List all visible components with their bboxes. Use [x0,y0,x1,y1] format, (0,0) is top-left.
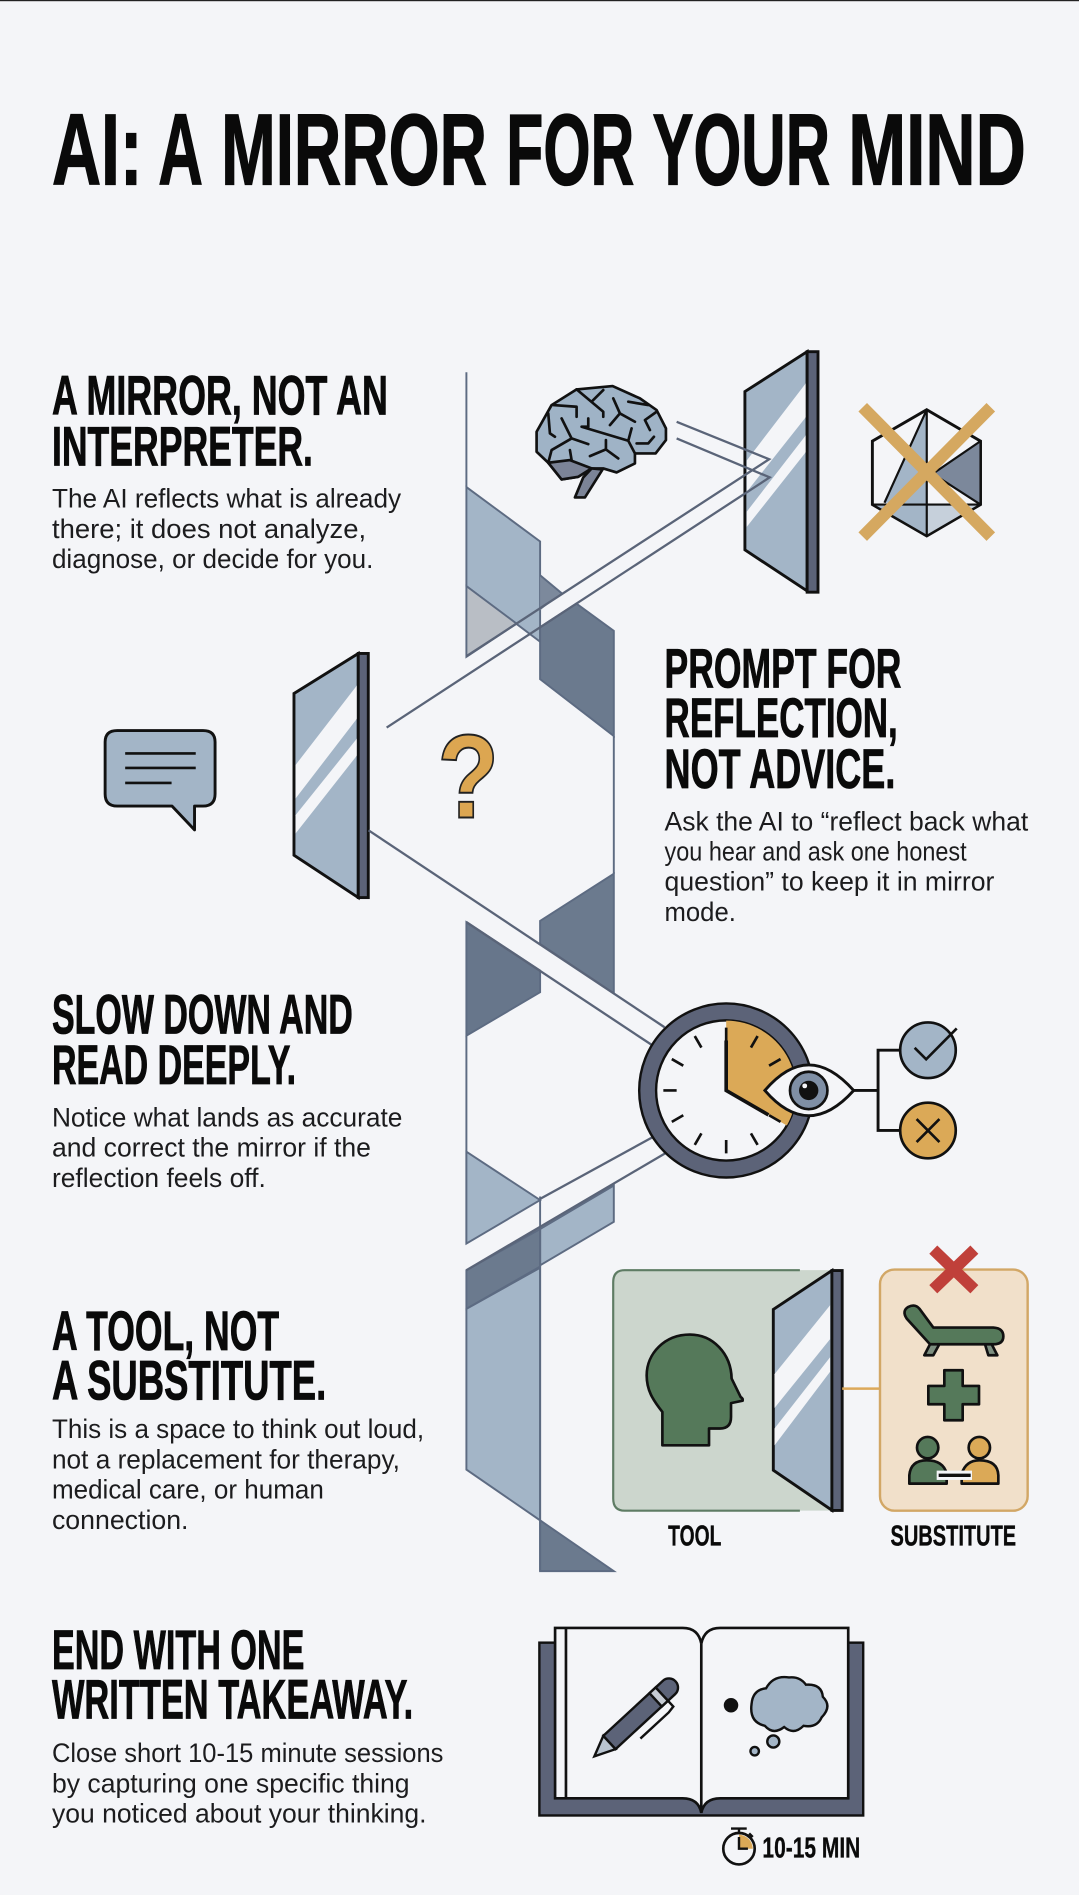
text: slow down body [52,1101,402,1193]
reflected light rays [369,422,770,1270]
title [52,92,1026,206]
text: slow down body: Notice what lands as accurate [52,1101,402,1132]
text: tool body: medical care, or human [52,1474,324,1505]
text: takeaway body: by capturing one specific thing [52,1767,410,1798]
heading: a tool, not a substitute: A SUBSTITUTE. [52,1349,326,1411]
text: slow down body: reflection feels off. [52,1162,266,1193]
text: takeaway body: you noticed about your thinking. [52,1797,427,1828]
text: mirror body [52,483,402,574]
heading: a tool, not a substitute [52,1300,326,1411]
title: AI: [52,92,143,206]
text: takeaway body: Close short 10-15 minute sessions [52,1737,443,1768]
heading: slow down and read deeply: SLOW DOWN AND [52,983,353,1045]
icon: crossed-out crystal [863,407,991,537]
text: prompt body: you hear and ask one honest [665,835,967,866]
text: prompt body: Ask the AI to “reflect back what [665,805,1029,836]
heading: prompt for reflection [665,638,901,800]
heading: a mirror, not an interpreter [52,365,388,477]
text: tool body: connection. [52,1504,188,1535]
heading: slow down and read deeply: READ DEEPLY. [52,1034,296,1096]
connector [842,1388,880,1390]
icon: head silhouette [647,1335,743,1445]
heading: end with one written takeaway: WRITTEN TAKEAWAY. [52,1669,413,1731]
icon: stopwatch [723,1829,755,1864]
icon: thought cloud [750,1677,827,1755]
heading: a tool, not a substitute: A TOOL, NOT [52,1300,279,1362]
icons: couch, medical cross, people [905,1306,1003,1484]
heading: prompt for reflection: NOT ADVICE. [665,738,895,800]
label: substitute: SUBSTITUTE [891,1521,1016,1553]
panel: tool [613,1270,833,1511]
heading: end with one written takeaway: END WITH ONE [52,1619,304,1681]
icon: mirror tool [773,1271,842,1510]
text: mirror body: The AI reflects what is already [52,483,402,514]
panel: substitute [880,1250,1028,1511]
icon: clock [639,1003,813,1177]
title: YOUR [652,92,830,206]
title: MIRROR [221,92,487,206]
title: FOR [506,92,634,206]
icon: mirror top [745,352,818,592]
icon: chat bubble [105,731,215,830]
text: takeaway body [52,1737,443,1828]
heading: slow down and read deeply [52,983,353,1096]
heading: a mirror, not an interpreter: INTERPRETER. [52,415,313,477]
icon: red cross [933,1250,974,1289]
icon: pen [588,1675,688,1770]
text: mirror body: diagnose, or decide for you. [52,543,373,574]
decision connector [854,1050,900,1130]
text: mirror body: there; it does not analyze, [52,513,366,544]
dot [724,1698,738,1713]
icon: eye [765,1065,854,1116]
icon: question mark: ? [437,712,499,843]
heading: prompt for reflection: PROMPT FOR [665,638,901,700]
text: prompt body [665,805,1029,927]
icon: mirror left [294,653,368,898]
title: A [158,92,203,206]
text: slow down body: and correct the mirror if the [52,1132,371,1163]
icon: brain [537,386,666,497]
icon: open book [539,1628,863,1815]
text: tool body: not a replacement for therapy, [52,1443,400,1474]
text: tool body: This is a space to think out loud, [52,1413,424,1444]
text: tool body [52,1413,424,1535]
label: duration: 10-15 MIN [762,1833,860,1865]
icon: check circle [900,1022,957,1078]
label: tool: TOOL [668,1521,721,1553]
text: prompt body: mode. [665,896,736,927]
icon: cross circle [900,1103,956,1158]
text: prompt body: question” to keep it in mirror [665,866,994,897]
heading: prompt for reflection: REFLECTION, [665,687,898,749]
heading: end with one written takeaway [52,1619,413,1731]
central geometric column [466,372,614,1571]
heading: a mirror, not an interpreter: A MIRROR, NOT AN [52,365,388,427]
